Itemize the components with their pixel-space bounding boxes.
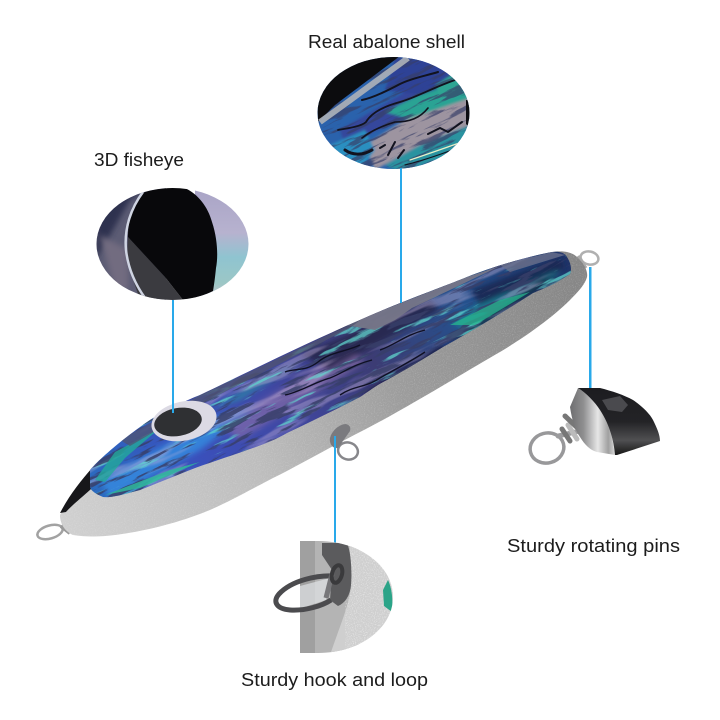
callout: rotating pin detail <box>527 388 660 467</box>
abalone teal texture <box>90 255 571 495</box>
pin black head <box>578 388 660 455</box>
fisheye dark grey wedge <box>127 237 183 300</box>
hook shadow tint <box>300 578 328 608</box>
heading: Real abalone shell: Real abalone shell <box>308 32 465 52</box>
callout circle: fisheye detail <box>96 188 249 300</box>
heading: Sturdy rotating pins: Sturdy rotating pins <box>507 536 680 556</box>
hook teal spot <box>383 580 392 612</box>
hook speckled silver area <box>331 546 393 652</box>
abalone shell inlay <box>90 252 571 498</box>
shell black lure edge <box>316 56 400 122</box>
callout line: rotating pins <box>589 267 592 389</box>
shell base <box>316 56 472 170</box>
silver body grain <box>86 252 586 534</box>
heading: 3D fisheye: 3D fisheye <box>94 150 184 170</box>
abalone colour patches <box>100 258 565 498</box>
icon: hook ring <box>276 564 344 610</box>
fisheye left slate area <box>96 188 166 300</box>
fisheye white stripe <box>126 192 145 298</box>
callout circle: abalone shell detail <box>318 57 470 169</box>
shell dark cracks <box>338 72 465 165</box>
callout circle: hook and loop detail <box>300 541 393 653</box>
pin silver dome <box>570 388 615 455</box>
abalone base colour <box>90 252 571 498</box>
belly loop anchor hole <box>330 424 350 448</box>
callout line: abalone shell <box>400 168 402 303</box>
grey top fade <box>345 266 500 330</box>
shell right shadow <box>466 100 470 126</box>
icon: lure eye <box>148 395 220 447</box>
hook dark plate <box>322 543 351 606</box>
abalone crack texture <box>90 258 568 498</box>
icon: nose eyelet <box>36 522 70 542</box>
shell texture <box>318 57 470 169</box>
shell colour bands <box>330 58 470 172</box>
abalone violet texture <box>90 252 565 489</box>
bright green lower edge <box>105 462 200 495</box>
fisheye holographic right area <box>195 188 249 300</box>
pin highlight <box>602 396 628 412</box>
callout line: fisheye <box>172 300 174 413</box>
heading: Sturdy hook and loop: Sturdy hook and loop <box>241 670 428 690</box>
lure: complete fishing lure body <box>36 198 660 653</box>
hand-drawn shell cracks <box>285 330 425 395</box>
icon: swivel ring <box>527 429 567 467</box>
black nose tip <box>60 468 92 513</box>
icon: tail eyelet <box>578 250 600 268</box>
shell silver edge <box>320 58 408 122</box>
silver lure body <box>60 251 587 537</box>
icon: swivel coil <box>558 416 584 441</box>
fisheye black pupil <box>128 188 217 300</box>
hook grey strip <box>315 541 359 653</box>
icon: belly loop <box>336 440 360 462</box>
callout line: hook and loop <box>334 436 336 543</box>
